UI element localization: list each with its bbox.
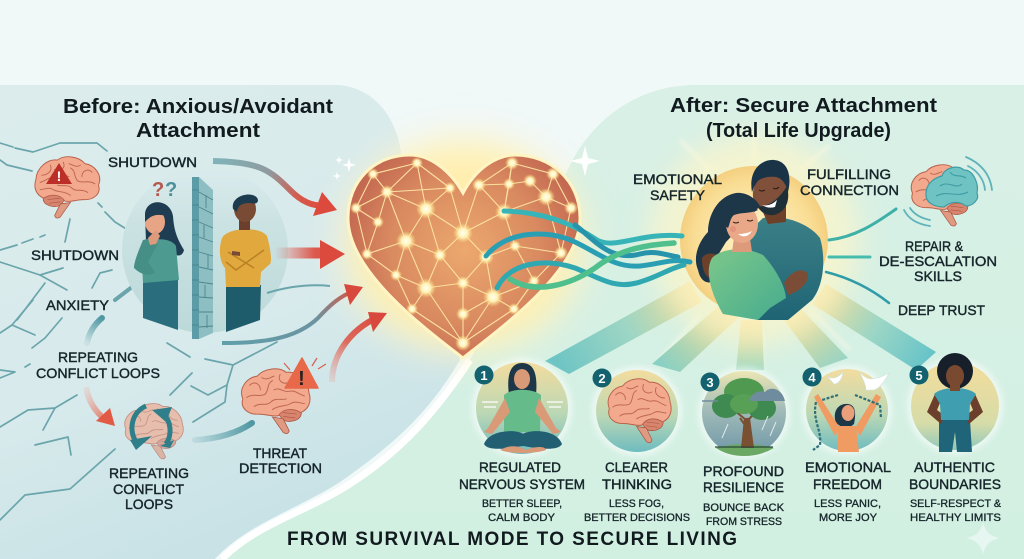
label: threat detection: THREAT [253,445,307,461]
network nodes [350,156,578,351]
text: item 1: BETTER SLEEP, [482,498,562,510]
ray to item 1 [545,281,702,374]
man torso [740,217,823,320]
label: threat detection: DETECTION [239,460,322,476]
heart glow [324,120,604,370]
panel: before background [0,85,460,559]
after heading [670,94,937,142]
arrow: conflict loop [86,387,115,426]
text: item 2: BETTER DECISIONS [584,512,690,524]
after heading: (Total Life Upgrade) [706,119,891,142]
central heart with neural network [348,155,580,358]
text: item 1: NERVOUS SYSTEM [459,476,585,492]
label: repeating conflict loops lower [109,465,189,512]
arrow: shutdown to heart [213,161,337,216]
ray to item 2 [652,305,738,372]
label: repair and de-escalation skills [879,238,997,284]
text: item 2: THINKING [602,476,672,492]
benefit 3: profound resilience [698,367,790,528]
text: item 4: LESS PANIC, [814,498,881,510]
badge 3: 3 [706,375,714,390]
before heading [63,95,333,142]
question marks: ? [152,179,164,201]
label: deep trust: DEEP TRUST [898,302,985,318]
figure: withdrawn man [220,194,271,332]
man head [749,160,791,224]
text: item 1: CALM BODY [488,512,556,524]
icon: healthy brain [592,366,682,456]
arrow: man to heart [275,240,345,269]
icon: woman breaking chains with dove [802,365,892,455]
text: item 4: EMOTIONAL [805,459,891,475]
text: item 4: MORE JOY [819,512,878,524]
panel: after background [222,85,1024,559]
label: shutdown top: SHUTDOWN [108,154,197,170]
divider: white curved band [222,360,470,559]
woman hair [696,193,760,282]
badge 2: 2 [598,371,606,386]
badge 4: 4 [808,370,816,385]
text: item 3: BOUNCE BACK [703,502,785,514]
figure: embracing couple [696,160,823,320]
text: item 2 [584,459,690,524]
before heading: Before: Anxious/Avoidant [63,95,333,118]
badge 1 [474,366,494,384]
icon: brain with threat triangle: ! [298,368,305,390]
benefit 2: clearer thinking [584,366,690,524]
benefit 4: emotional freedom [802,365,892,524]
question marks [152,179,177,201]
label: repeating conflict loops lower: CONFLICT [113,481,184,497]
after heading: After: Secure Attachment [670,94,937,117]
icon: confident woman [907,353,1003,454]
icon: brain with cycle arrows [125,404,183,459]
label: repeating conflict loops left [36,349,160,381]
text: item 5: HEALTHY LIMITS [910,512,1001,524]
before panel: fractured cracks [0,143,277,520]
text: item 2: LESS FOG, [609,498,664,510]
icon: tree in storm [698,367,790,459]
scene backdrop circle [122,167,288,333]
icon: brain with threat triangle [242,358,326,434]
text: item 1 [459,459,585,524]
ribbons from heart to couple [486,211,690,288]
label: repeating conflict loops left: REPEATING [58,349,138,365]
arrow: cracks to heart [222,284,363,343]
badge 2 [592,368,612,388]
label: threat detection [239,445,322,476]
text: item 3: RESILIENCE [703,479,784,495]
label: emotional safety: EMOTIONAL [633,171,722,187]
label: fulfilling connection: CONNECTION [800,182,899,198]
ray to item 3 [736,320,764,370]
after panel: light rays [545,130,936,374]
label: emotional safety [633,171,722,203]
text: item 4 [805,459,891,524]
text: item 1: REGULATED [479,459,561,475]
label: repeating conflict loops lower: REPEATING [109,465,189,481]
badge 3 [700,372,720,392]
label: repair and de-escalation skills: SKILLS [914,268,962,284]
text: item 4: FREEDOM [813,476,882,492]
text: item 2: CLEARER [605,459,668,475]
couple halo [649,135,859,345]
bottom tagline: FROM SURVIVAL MODE TO SECURE LIVING [287,529,737,550]
label: repair and de-escalation skills: DE-ESCALATION [879,253,997,269]
label: repeating conflict loops lower: LOOPS [125,496,173,512]
benefit 5: authentic boundaries [907,353,1003,524]
label: shutdown left: SHUTDOWN [31,247,119,263]
text: item 3 [703,463,785,528]
label: anxiety: ANXIETY [46,297,110,313]
icon: brain with alarm [35,157,100,218]
before heading: Attachment [136,119,260,142]
man's hand on her arm [784,270,808,295]
label: fulfilling connection [800,166,899,198]
man's arm around her [702,254,720,278]
scene: couple separated by wall [122,167,288,339]
ray to item 4 [781,308,848,368]
arrow: threat brain to heart [332,312,387,382]
benefit 1: regulated nervous system [459,358,585,524]
text: item 3: FROM STRESS [706,516,782,528]
woman head [725,205,758,252]
ray to item 5 [812,284,936,370]
badge 1: 1 [480,368,488,383]
label: repeating conflict loops left: CONFLICT LOOPS [36,365,160,381]
text: item 5: AUTHENTIC [914,459,995,475]
text: item 5: SELF-RESPECT & [910,498,1002,510]
sparkles near heart [333,146,600,180]
badge 5: 5 [915,368,923,383]
text: item 5 [909,459,1002,524]
icon: meditating woman [472,358,572,458]
label: fulfilling connection: FULFILLING [807,166,891,182]
figure: worried woman [134,202,184,330]
sparkle bottom right [966,522,1000,555]
badge 4 [802,368,822,386]
badge 5 [910,366,928,384]
question marks: ? [165,179,177,201]
label: repair and de-escalation skills: REPAIR & [905,238,964,254]
label: emotional safety: SAFETY [650,187,706,203]
icon: brain with alarm: ! [57,168,61,184]
text: item 3: PROFOUND [703,463,784,479]
icon: integrated brain with waves [904,157,992,226]
text: item 5: BOUNDARIES [909,476,1001,492]
connector lines from couple to skills [826,209,896,303]
woman body [709,249,786,320]
network links [356,163,571,343]
brick wall [192,177,213,339]
